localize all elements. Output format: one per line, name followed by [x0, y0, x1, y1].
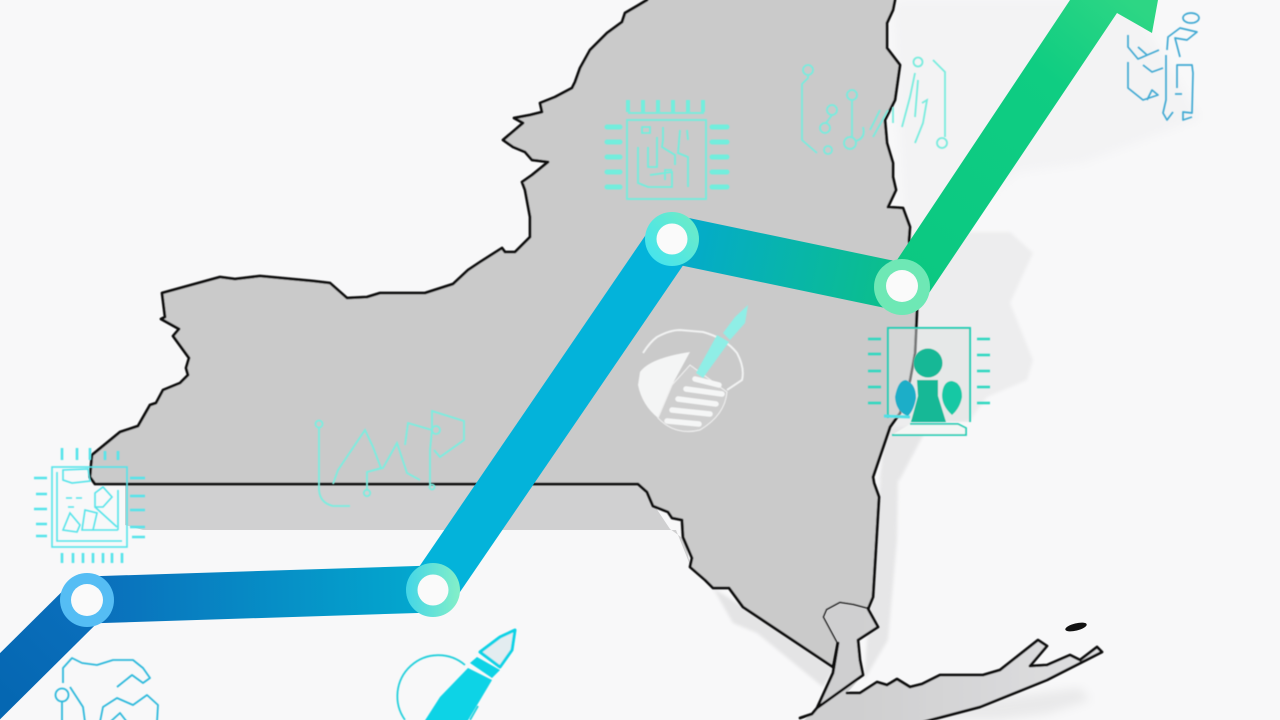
node 1: [60, 573, 114, 627]
icon: hand and lightbulb: [638, 305, 748, 432]
icon: circuit sketch upper right: [802, 58, 947, 154]
icon: sketch top right: [1128, 13, 1199, 120]
hand fill: [638, 352, 690, 418]
segment 2: [87, 589, 433, 600]
icon: pen bottom centre: [397, 630, 515, 720]
arrow: [889, 0, 1158, 302]
segment 4: [672, 239, 902, 287]
segment 3: [433, 239, 672, 589]
pen: [696, 335, 729, 378]
icon: people chip: [868, 328, 990, 435]
node 4: [874, 259, 930, 315]
icon: map sketch bottom left: [56, 658, 158, 720]
small island: [1064, 621, 1088, 633]
Long Island fill: [800, 603, 1102, 720]
node 3: [645, 212, 699, 266]
icon: circuit chip upper: [607, 100, 727, 199]
map of New York State: [90, 0, 917, 667]
Long Island outline: [800, 609, 1102, 720]
hand outline: [643, 330, 743, 390]
segment 1: [0, 600, 87, 716]
bulb threads: [658, 365, 727, 432]
Long Island: [800, 603, 1102, 720]
icon: circuit sketch on map left: [316, 411, 464, 506]
icon: circuit chip left: [34, 448, 145, 563]
node 2: [406, 563, 460, 617]
